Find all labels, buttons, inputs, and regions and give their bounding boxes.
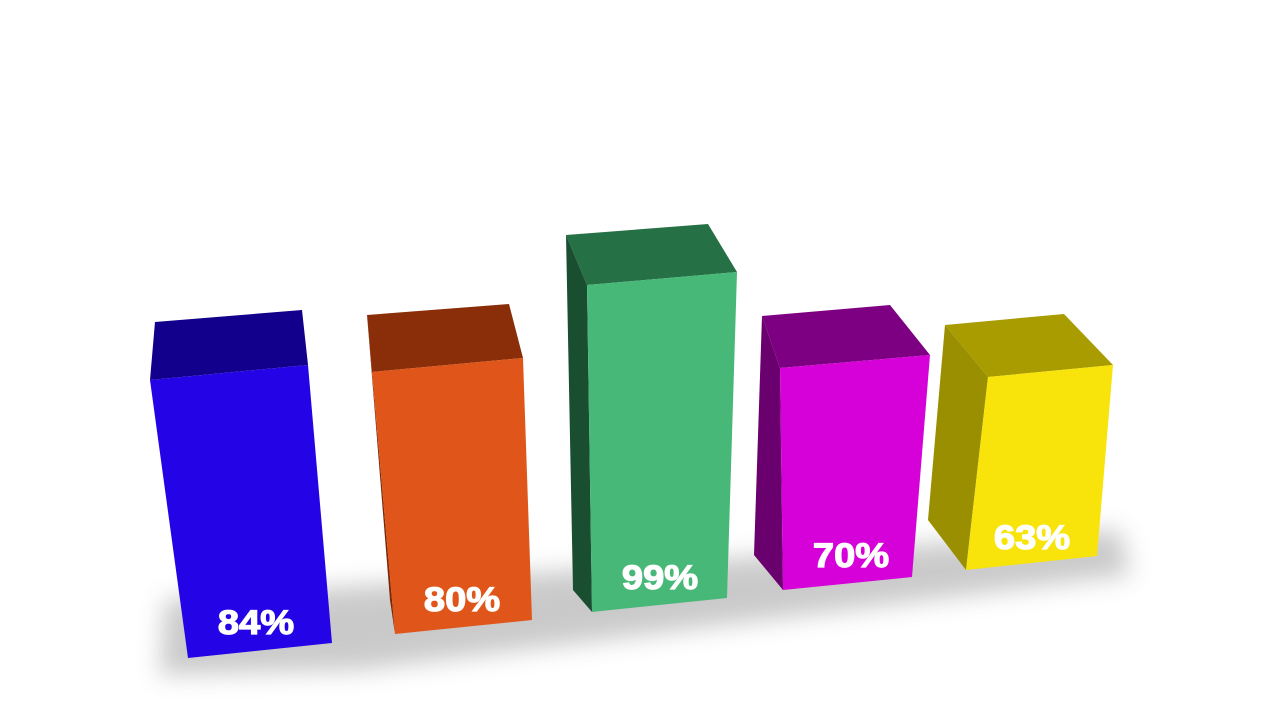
bar: green 99% xyxy=(566,224,737,612)
floor shadow xyxy=(160,530,1130,675)
bar: yellow 63%: 63% xyxy=(994,518,1070,557)
bar: green 99%: 99% xyxy=(622,558,698,597)
bar: orange 80%: 80% xyxy=(424,580,500,619)
bar: blue 84% xyxy=(150,310,332,658)
bar: magenta 70% xyxy=(754,305,930,590)
bar: yellow 63% xyxy=(928,314,1113,570)
bar: blue 84%: 84% xyxy=(218,603,294,642)
bar: orange 80% xyxy=(367,304,532,634)
bar: magenta 70%: 70% xyxy=(813,536,889,575)
